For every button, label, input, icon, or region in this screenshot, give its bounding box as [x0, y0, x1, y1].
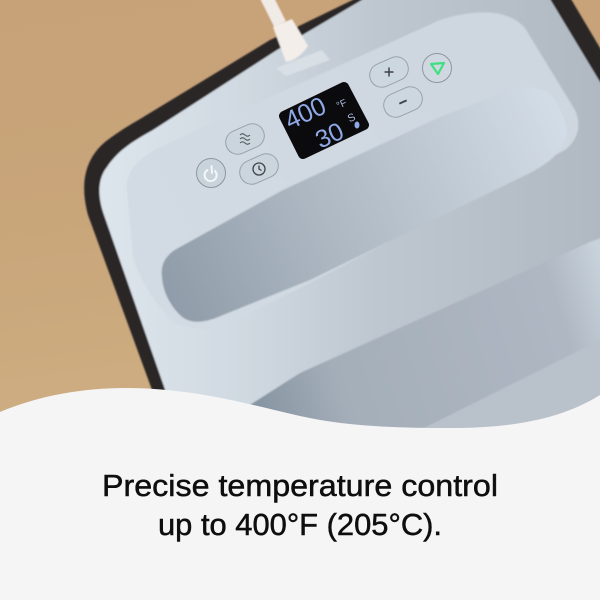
timer button — [236, 150, 282, 188]
status dot — [354, 122, 360, 128]
cable connector — [273, 19, 308, 62]
white wave panel — [0, 388, 600, 600]
upper handle recess — [162, 87, 567, 322]
headline — [102, 468, 498, 542]
power glyph — [205, 166, 217, 181]
LCD display — [280, 87, 364, 154]
minus button — [380, 83, 426, 121]
start button — [422, 54, 452, 82]
minus glyph — [399, 100, 407, 104]
clock glyph — [253, 163, 265, 175]
wood table background — [0, 0, 600, 430]
raised control panel — [127, 12, 578, 329]
power button — [196, 158, 226, 188]
outer lid surface — [99, 0, 600, 440]
headline line 2: up to 400°F (205°C). — [158, 507, 442, 542]
headline line 1: Precise temperature control — [102, 468, 498, 503]
lower lid band — [410, 337, 600, 440]
plus glyph — [384, 68, 394, 76]
control buttons and display — [196, 53, 452, 188]
temperature reading: 400 — [280, 90, 331, 135]
dark rim of the base — [84, 0, 600, 430]
fahrenheit unit: °F — [335, 98, 349, 112]
power cable — [266, 0, 330, 76]
time reading: 30 — [311, 117, 348, 154]
cable cord — [266, 0, 280, 24]
lower handle recess — [240, 236, 600, 432]
cable socket plate — [276, 50, 330, 76]
steam button — [222, 120, 268, 158]
seconds unit: S — [346, 111, 358, 125]
product: heat press — [84, 0, 600, 440]
plus button — [366, 53, 412, 91]
steam wave glyph — [240, 134, 250, 144]
start triangle — [431, 63, 444, 74]
